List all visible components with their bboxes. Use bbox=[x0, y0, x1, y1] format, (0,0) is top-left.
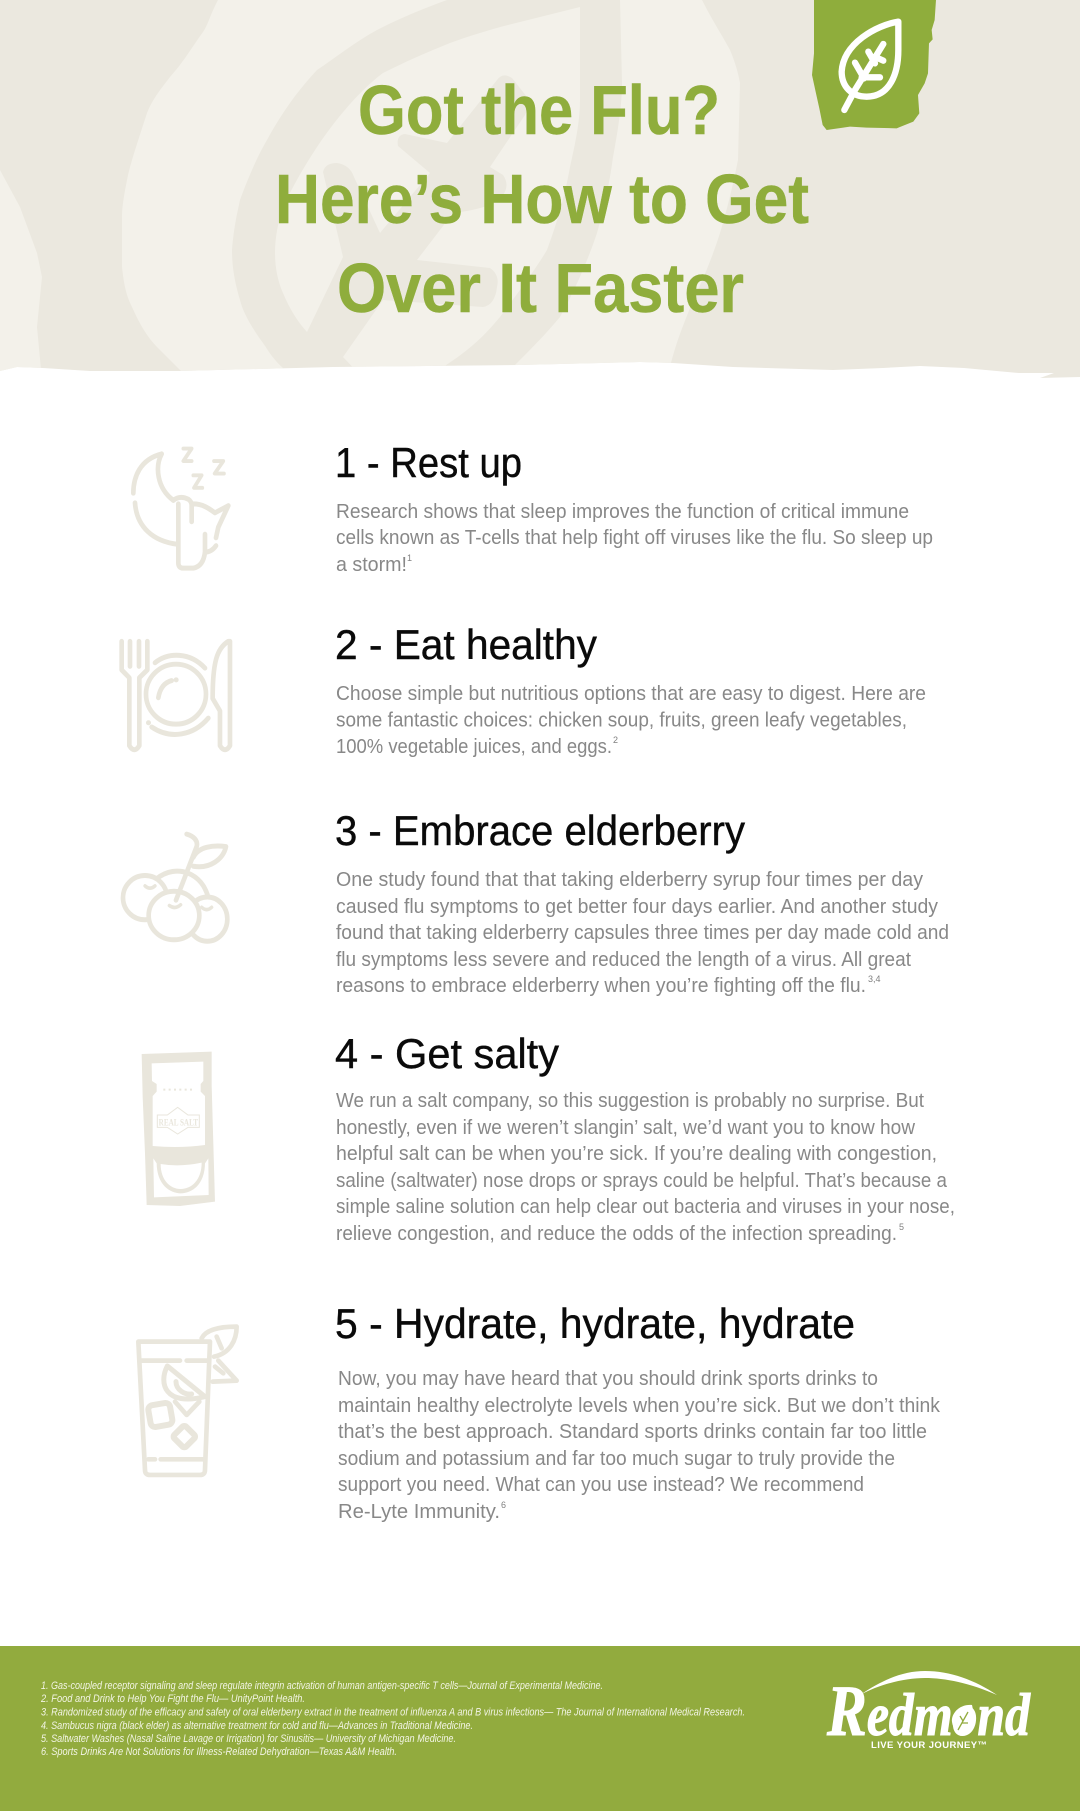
step 3: embrace elderberry: flu symptoms less severe and reduced the length of a virus. All great bbox=[336, 949, 911, 971]
step 4: get salty: helpful salt can be when you’re sick. If you’re dealing with congestion, bbox=[336, 1143, 937, 1165]
step 3: embrace elderberry: found that taking elderberry capsules three times per day made cold and bbox=[336, 922, 949, 944]
step 1: rest up: 1 - Rest up bbox=[335, 439, 522, 486]
footer panel bbox=[0, 1646, 1080, 1811]
references: 3. Randomized study of the efficacy and safety of oral elderberry extract in the treatment of influenza A and B virus infections— The Journal of International Medical Research. bbox=[41, 1706, 745, 1718]
references: 6. Sports Drinks Are Not Solutions for Illness-Related Dehydration—Texas A&M Health. bbox=[41, 1746, 397, 1758]
Redmond logo: LIVE YOUR JOURNEY™ bbox=[871, 1740, 987, 1751]
icon: drink glass bbox=[138, 1327, 237, 1475]
step 1: rest up: a storm! bbox=[336, 554, 407, 576]
step 3: embrace elderberry: 3 - Embrace elderberry bbox=[335, 807, 745, 854]
step 3: embrace elderberry: reasons to embrace elderberry when you’re fighting off the flu. bbox=[336, 975, 866, 997]
step 5: hydrate: that’s the best approach. Standard sports drinks contain far too little bbox=[338, 1421, 927, 1443]
references bbox=[40, 1680, 745, 1758]
references: 2. Food and Drink to Help You Fight the Flu— UnityPoint Health. bbox=[40, 1693, 305, 1705]
step 1: rest up bbox=[335, 439, 933, 576]
step 5: hydrate: Re-Lyte Immunity. bbox=[338, 1501, 500, 1523]
step 4: get salty bbox=[335, 1030, 955, 1245]
icon: salt bag bbox=[142, 1052, 215, 1206]
step 5: hydrate: 6 bbox=[501, 1500, 506, 1510]
references: 4. Sambucus nigra (black elder) as alternative treatment for cold and flu—Advances in Traditional Medicine. bbox=[41, 1720, 473, 1732]
icon: moon and sleeping cat bbox=[133, 449, 228, 568]
step 4: get salty: honestly, even if we weren’t slangin’ salt, we’d want you to know how bbox=[336, 1117, 916, 1139]
Redmond logo: Redmond bbox=[826, 1671, 1031, 1751]
step 4: get salty: We run a salt company, so this suggestion is probably no surprise. But bbox=[336, 1090, 924, 1112]
references: 5. Saltwater Washes (Nasal Saline Lavage or Irrigation) for Sinusitis— University of Michigan Medicine. bbox=[41, 1733, 456, 1745]
step 3: embrace elderberry: One study found that that taking elderberry syrup four times per day bbox=[336, 869, 923, 891]
icon: salt bag: REAL SALT bbox=[159, 1118, 199, 1128]
step 4: get salty: 4 - Get salty bbox=[335, 1030, 559, 1077]
step 4: get salty: simple saline solution can help clear out bacteria and viruses in your nose, bbox=[336, 1196, 955, 1218]
step 4: get salty: 5 bbox=[899, 1222, 904, 1232]
step 1: rest up: Research shows that sleep improves the function of critical immune bbox=[336, 501, 909, 523]
step 2: eat healthy: 100% vegetable juices, and eggs. bbox=[336, 736, 612, 758]
step 3: embrace elderberry: caused flu symptoms to get better four days earlier. And another study bbox=[336, 896, 938, 918]
step 1: rest up: 1 bbox=[407, 553, 412, 563]
step 2: eat healthy bbox=[335, 621, 926, 758]
step 5: hydrate: 5 - Hydrate, hydrate, hydrate bbox=[335, 1300, 855, 1347]
icon: elderberries bbox=[123, 834, 227, 941]
step 5: hydrate: support you need. What can you use instead? We recommend bbox=[338, 1474, 864, 1496]
step 4: get salty: saline (saltwater) nose drops or sprays could be helpful. That’s because a bbox=[336, 1170, 948, 1192]
title: Got the Flu? bbox=[358, 71, 720, 149]
step 2: eat healthy: Choose simple but nutritious options that are easy to digest. Here are bbox=[336, 683, 926, 705]
step 5: hydrate: maintain healthy electrolyte levels when you’re sick. But we don’t think bbox=[338, 1395, 941, 1417]
step 3: embrace elderberry bbox=[335, 807, 949, 997]
step 5: hydrate: Now, you may have heard that you should drink sports drinks to bbox=[338, 1368, 878, 1390]
icon: plate with fork and knife bbox=[122, 641, 230, 750]
step 5: hydrate bbox=[335, 1300, 941, 1523]
leaf badge bbox=[812, 0, 936, 130]
title: Over It Faster bbox=[337, 249, 744, 327]
step 3: embrace elderberry: 3,4 bbox=[868, 974, 881, 984]
step 1: rest up: cells known as T-cells that help fight off viruses like the flu. So sleep up bbox=[336, 527, 933, 549]
step 2: eat healthy: 2 bbox=[613, 735, 618, 745]
header panel bbox=[0, 0, 1080, 380]
title bbox=[275, 71, 809, 327]
step 2: eat healthy: some fantastic choices: chicken soup, fruits, green leafy vegetables, bbox=[336, 710, 907, 732]
step 4: get salty: relieve congestion, and reduce the odds of the infection spreading. bbox=[336, 1223, 897, 1245]
step 2: eat healthy: 2 - Eat healthy bbox=[335, 621, 597, 668]
step 5: hydrate: sodium and potassium and far too much sugar to truly provide the bbox=[338, 1448, 895, 1470]
title: Here’s How to Get bbox=[275, 160, 809, 238]
references: 1. Gas-coupled receptor signaling and sleep regulate integrin activation of human antigen-specific T cells—Journal of Experimental Medicine. bbox=[41, 1680, 603, 1692]
